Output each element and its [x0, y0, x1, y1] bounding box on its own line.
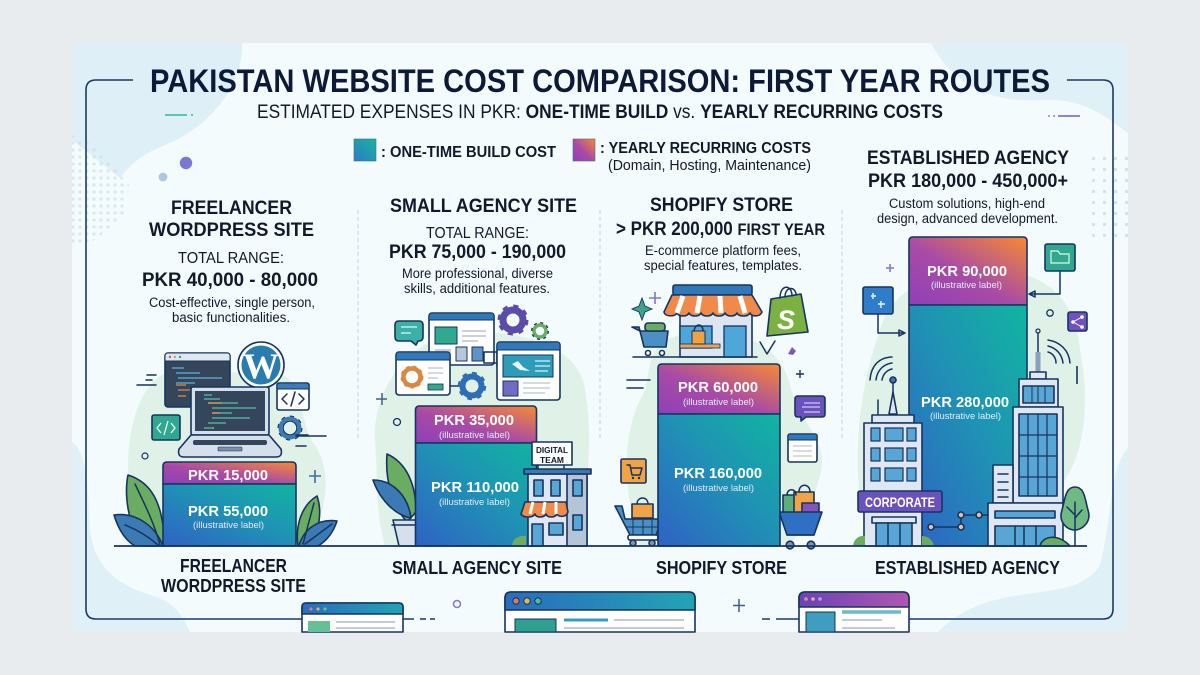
label: freelancer bottom: FREELANCER — [180, 556, 287, 576]
bar chart: freelancer stack: PKR 55,000 — [188, 503, 268, 520]
icon: code tag box — [277, 383, 309, 410]
legend: yearly recurring costs: (Domain, Hosting, Maintenance) — [608, 158, 811, 174]
icon: shopify store — [632, 285, 808, 357]
bar chart: shopify stack: PKR 60,000 — [678, 379, 758, 396]
build segment — [909, 305, 1027, 546]
panel: shopify text — [616, 195, 825, 273]
panel: freelancer text: PKR 40,000 - 80,000 — [142, 270, 318, 291]
panel: small agency text: More professional, diverse — [402, 266, 553, 281]
circuit connector — [928, 512, 988, 530]
icon: plus and ring — [454, 599, 745, 612]
icon: shopify bag — [767, 287, 808, 336]
icon: left window — [396, 352, 450, 395]
icon: bottom window centre — [505, 592, 695, 632]
recurring segment — [658, 364, 780, 414]
icon: wordpress logo — [238, 342, 284, 388]
panel: small agency text: TOTAL RANGE: — [426, 225, 529, 242]
icon: small agency illustration — [376, 308, 560, 426]
panel: small agency text: skills, additional features. — [404, 281, 550, 296]
panel: established agency text: PKR 180,000 - 450,000+ — [868, 171, 1068, 192]
panel: established agency text: ESTABLISHED AGENCY — [867, 148, 1069, 169]
icon: right window — [497, 342, 560, 400]
build segment — [658, 414, 780, 546]
label: small agency bottom: SMALL AGENCY SITE — [392, 558, 562, 578]
decoration lines — [137, 375, 326, 446]
label: established bottom: ESTABLISHED AGENCY — [875, 558, 1060, 578]
icon: green code badge — [152, 415, 180, 440]
bar chart: small agency stack: (illustrative label) — [439, 430, 510, 441]
legend: yearly recurring costs — [573, 139, 811, 174]
icon: blue gear — [450, 352, 497, 397]
icon: freelancer workstation — [137, 342, 326, 483]
icon: small cart — [632, 323, 668, 356]
label: freelancer bottom — [161, 556, 306, 596]
icon: small agency plant — [373, 454, 416, 546]
frame outline — [86, 80, 1113, 619]
icon: main window — [429, 313, 494, 365]
legend: one-time build cost — [354, 139, 556, 161]
bar chart: established agency stack: (illustrative label) — [930, 411, 1001, 422]
icon: shopify bag: S — [777, 305, 795, 335]
panel: freelancer text: FREELANCER — [171, 198, 292, 219]
icon: network tiles — [863, 244, 1087, 340]
panel: established agency text — [867, 148, 1069, 226]
bar chart: freelancer stack: (illustrative label) — [193, 520, 264, 531]
icon: purple gear — [501, 308, 525, 332]
icon: back code window — [165, 353, 230, 407]
bar chart: shopify stack: (illustrative label) — [683, 483, 754, 494]
panel: small agency text — [389, 196, 577, 296]
icon: cart with bag — [615, 498, 662, 546]
build segment — [163, 484, 296, 546]
panel: small agency text: PKR 75,000 - 190,000 — [389, 242, 566, 263]
icon: digital team building: DIGITAL — [536, 445, 568, 455]
panel: freelancer text: TOTAL RANGE: — [178, 250, 284, 267]
icon: bottom window right — [799, 592, 909, 632]
panel: freelancer text — [142, 198, 318, 325]
bar chart: established agency stack: PKR 90,000 — [927, 263, 1007, 280]
panel: freelancer text: WORDPRESS SITE — [149, 220, 314, 241]
build segment — [416, 443, 536, 546]
panel: shopify text: special features, templates. — [644, 258, 802, 273]
legend: yearly recurring costs: : YEARLY RECURRING COSTS — [600, 140, 811, 157]
panel: infographic card — [72, 43, 1128, 632]
icon: settings gear — [280, 418, 300, 438]
icon: green gear — [533, 324, 547, 338]
label: freelancer bottom: WORDPRESS SITE — [161, 576, 306, 596]
icon: digital team building: TEAM — [540, 455, 564, 465]
bar chart: established agency stack: (illustrative label) — [931, 280, 1002, 291]
bar chart: freelancer stack: PKR 15,000 — [188, 467, 268, 484]
bar chart: small agency stack: PKR 35,000 — [434, 412, 514, 429]
legend — [354, 139, 811, 174]
legend: one-time build cost: : ONE-TIME BUILD COST — [381, 144, 556, 161]
panel: shopify text: E-commerce platform fees, — [645, 243, 801, 258]
panel: shopify text: SHOPIFY STORE — [650, 195, 793, 216]
recurring segment — [909, 237, 1027, 305]
panel: freelancer text: Cost-effective, single person, — [149, 295, 315, 310]
bar chart: shopify stack: PKR 160,000 — [674, 465, 762, 482]
bar chart: shopify stack: (illustrative label) — [683, 397, 754, 408]
panel: small agency text: SMALL AGENCY SITE — [390, 196, 577, 217]
bar chart: established agency stack — [909, 237, 1027, 546]
title: PAKISTAN WEBSITE COST COMPARISON: FIRST YEAR ROUTES — [150, 63, 1050, 99]
icon: chat list bubble — [795, 396, 825, 421]
panel: freelancer text: basic functionalities. — [172, 310, 290, 325]
icon: purple share tile — [1068, 312, 1087, 331]
panel: shopify text: > PKR 200,000 FIRST YEAR — [616, 219, 825, 240]
bar chart: established agency stack: PKR 280,000 — [921, 394, 1009, 411]
icon: tree — [1061, 487, 1089, 546]
bar chart: small agency stack: (illustrative label) — [439, 497, 510, 508]
icon: corporate right tower — [928, 340, 1089, 546]
icon: chat bubble — [395, 321, 423, 345]
label: corporate sign: CORPORATE — [865, 494, 935, 510]
icon: orange cart tile — [621, 459, 646, 483]
icon: wordpress logo: W — [243, 346, 279, 386]
panel: established agency text: design, advanced development. — [877, 211, 1058, 226]
green backdrop blobs — [128, 270, 1085, 546]
subtitle: ESTIMATED EXPENSES IN PKR: ONE-TIME BUILD vs. YEARLY RECURRING COSTS — [257, 101, 943, 123]
icon: basket with bags — [768, 485, 822, 549]
icon: laptop with code — [179, 387, 281, 457]
recurring segment — [416, 406, 536, 443]
bar chart: small agency stack: PKR 110,000 — [431, 479, 519, 496]
chart baseline — [114, 545, 1087, 547]
icon: blue hash tile — [863, 287, 893, 314]
decorative accents — [159, 115, 1080, 440]
panel: established agency text: Custom solutions, high-end — [889, 196, 1045, 211]
icon: digital team building — [512, 442, 591, 546]
label: shopify bottom: SHOPIFY STORE — [656, 558, 787, 578]
bar chart: small agency stack — [416, 406, 536, 546]
icon: bottom window left — [302, 603, 403, 632]
icon: shopify side elements — [615, 370, 825, 549]
icon: green folder tile — [1045, 244, 1075, 271]
bar chart: shopify stack — [658, 364, 780, 546]
bar chart: freelancer stack — [163, 462, 296, 546]
recurring segment — [163, 462, 296, 484]
icon: storefront — [633, 285, 762, 357]
label: corporate sign — [858, 491, 942, 512]
icon: freelancer leaves — [114, 475, 337, 546]
icon: list window — [788, 434, 817, 462]
icon: corporate left building — [853, 357, 942, 546]
